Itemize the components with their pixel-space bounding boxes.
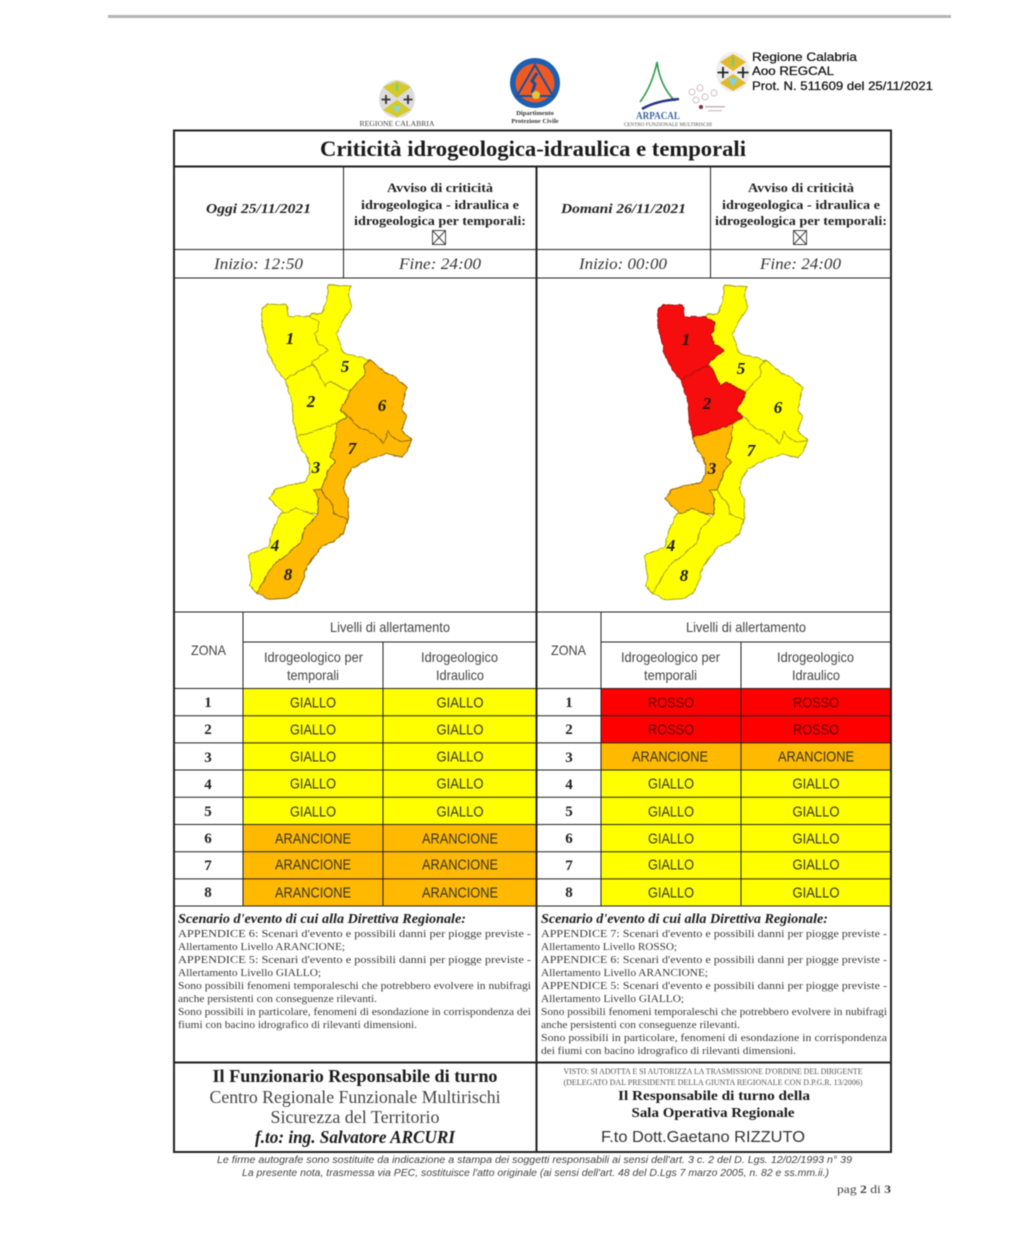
rows tomorrow: GIALLO — [648, 856, 694, 874]
table header today: Idrogeologico — [421, 649, 498, 665]
table: alert levels tomorrow — [551, 619, 891, 906]
table header tomorrow: temporali — [644, 667, 697, 683]
map: Calabria tomorrow: 7 — [747, 441, 757, 460]
stamp text: Prot. N. 511609 del 25/11/2021 — [752, 79, 933, 93]
rows today: GIALLO — [290, 804, 336, 820]
logo row — [360, 58, 725, 128]
rows today: 5 — [204, 804, 212, 820]
logo: Dipartimento Protezione Civile: Dipartimento — [516, 110, 554, 117]
map: Calabria tomorrow: 6 — [774, 398, 783, 417]
signature block left: Sicurezza del Territorio — [270, 1107, 440, 1127]
rows today: GIALLO — [290, 748, 336, 766]
rows tomorrow: GIALLO — [792, 884, 840, 902]
text block: scenario tomorrow — [541, 912, 887, 1057]
rows tomorrow — [565, 694, 854, 902]
map: Calabria today: 5 — [341, 357, 350, 376]
text block: scenario tomorrow: APPENDICE 7: Scenari d'evento e possibili danni per piogge previste - — [541, 928, 887, 940]
logo: molecule mark — [689, 85, 725, 112]
text block: scenario today: Allertamento Livello GIALLO; — [178, 967, 321, 979]
rows tomorrow: ROSSO — [648, 722, 694, 738]
panel: date header tomorrow — [560, 181, 887, 273]
rows today: 2 — [204, 722, 212, 738]
rows tomorrow: 7 — [565, 858, 573, 874]
logo: Dipartimento Protezione Civile: Protezione Civile — [511, 118, 559, 125]
rows tomorrow: 4 — [565, 777, 573, 793]
table header today: Livelli di allertamento — [330, 619, 450, 635]
panel: date header tomorrow: idrogeologica per temporali: — [715, 214, 887, 228]
logo: ARPACAL: ARPACAL — [636, 110, 680, 122]
panel: date header today: Oggi 25/11/2021 — [206, 202, 311, 217]
rows today: ARANCIONE — [275, 830, 351, 848]
rows tomorrow: GIALLO — [792, 804, 840, 820]
rows today: ARANCIONE — [422, 830, 498, 848]
text block: scenario tomorrow: Allertamento Livello GIALLO; — [541, 993, 684, 1005]
logo: ARPACAL: CENTRO FUNZIONALE MULTIRISCHI — [624, 123, 712, 128]
map: Calabria today: 6 — [378, 396, 387, 415]
table header today — [191, 619, 498, 683]
panel: date header today: Fine: 24:00 — [398, 256, 481, 273]
text block: scenario today — [178, 912, 531, 1031]
map: Calabria tomorrow: 5 — [737, 359, 746, 378]
panel: date header today: idrogeologica - idraulica e — [361, 198, 520, 212]
table header tomorrow: Livelli di allertamento — [686, 619, 806, 635]
map: Calabria today: 1 — [286, 329, 294, 348]
logo: Regione Calabria — [360, 80, 435, 128]
panel: date header today: Inizio: 12:50 — [213, 256, 303, 273]
panel: date header tomorrow: Fine: 24:00 — [759, 256, 841, 273]
icon: coat of arms stamp — [716, 52, 750, 92]
text block: scenario today: fiumi con bacino idrografico di rilevanti dimensioni. — [178, 1019, 417, 1031]
rows tomorrow: GIALLO — [648, 884, 694, 902]
rows tomorrow: 2 — [565, 722, 573, 738]
table header tomorrow: Idrogeologico per — [621, 649, 720, 665]
text block: scenario today: Scenario d'evento di cui alla Direttiva Regionale: — [178, 912, 466, 927]
map: Calabria tomorrow: 4 — [666, 536, 675, 555]
rows tomorrow: ARANCIONE — [632, 748, 708, 766]
map: Calabria tomorrow: 8 — [680, 566, 689, 585]
table header tomorrow — [551, 619, 854, 683]
rows today: GIALLO — [436, 748, 484, 766]
text block: scenario today: Allertamento Livello ARANCIONE; — [178, 941, 345, 953]
map: Calabria tomorrow: 2 — [702, 394, 712, 413]
logo: ARPACAL — [624, 62, 712, 128]
signature block left: f.to: ing. Salvatore ARCURI — [255, 1127, 456, 1147]
panel: date header tomorrow: Inizio: 00:00 — [578, 256, 667, 273]
rows today: 4 — [204, 777, 212, 793]
map: Calabria tomorrow: 1 — [682, 330, 690, 349]
rows tomorrow: GIALLO — [792, 856, 840, 874]
map: Calabria today — [248, 285, 412, 599]
signature block left — [210, 1066, 500, 1147]
text block: scenario tomorrow: dei fiumi con bacino idrografico di rilevanti dimensioni. — [541, 1045, 796, 1057]
panel: date header today: idrogeologica per temporali: — [354, 214, 526, 228]
panel: date header tomorrow: idrogeologica - idraulica e — [722, 198, 881, 212]
signature block right: Sala Operativa Regionale — [632, 1106, 794, 1121]
rows tomorrow: ARANCIONE — [778, 748, 854, 766]
rows today — [204, 694, 498, 902]
signature block right: VISTO: SI ADOTTA E SI AUTORIZZA LA TRASMISSIONE D'ORDINE DEL DIRIGENTE — [564, 1067, 863, 1076]
map: Calabria tomorrow — [644, 285, 808, 600]
signature block right: Il Responsabile di turno della — [618, 1089, 810, 1104]
table header today: Idraulico — [436, 667, 484, 683]
rows today: 6 — [204, 831, 212, 847]
rows tomorrow: GIALLO — [792, 776, 840, 792]
text block: scenario today: APPENDICE 6: Scenari d'evento e possibili danni per piogge previste - — [178, 928, 531, 940]
text block: scenario tomorrow: anche persistenti con conseguenze rilevanti. — [541, 1019, 740, 1031]
panel: date header today — [206, 181, 526, 273]
map: Calabria today: 4 — [270, 536, 279, 555]
footnote: Le firme autografe sono sostituite da indicazione a stampa dei soggetti responsabili ai sensi dell'art. 3 c. 2 del D. Lgs. 12/02/1993 n° 39 — [217, 1155, 852, 1166]
rows tomorrow: ROSSO — [793, 722, 839, 738]
text block: scenario tomorrow: Allertamento Livello ROSSO; — [541, 941, 677, 953]
table header tomorrow: Idraulico — [792, 667, 840, 683]
signature block left: Centro Regionale Funzionale Multirischi — [210, 1087, 500, 1107]
rows today: GIALLO — [290, 694, 336, 712]
rows tomorrow: GIALLO — [648, 830, 694, 848]
signature block right: (DELEGATO DAL PRESIDENTE DELLA GIUNTA REGIONALE CON D.P.G.R. 13/2006) — [564, 1078, 863, 1087]
title: Criticità idrogeologica-idraulica e temporali — [320, 136, 746, 161]
footnote: La presente nota, trasmessa via PEC, sostituisce l'atto originale (ai sensi dell'art. 48 del D.Lgs 7 marzo 2005, n. 82 e ss.mm.ii.) — [242, 1168, 829, 1179]
text block: scenario today: anche persistenti con conseguenze rilevanti. — [178, 993, 377, 1005]
rows today: GIALLO — [436, 722, 484, 738]
panel: date header tomorrow: Avviso di criticità — [748, 181, 855, 195]
rows tomorrow: 8 — [565, 885, 573, 901]
text block: scenario tomorrow: Sono possibili in particolare, fenomeni di esondazione in corrispondenza — [541, 1032, 887, 1044]
map: Calabria today: 3 — [311, 458, 321, 477]
rows tomorrow: 5 — [565, 804, 573, 820]
rows today: 7 — [204, 858, 212, 874]
rows tomorrow: GIALLO — [648, 776, 694, 792]
rows tomorrow: ROSSO — [793, 694, 839, 712]
rows today: ARANCIONE — [275, 856, 351, 874]
level cells tomorrow — [601, 688, 891, 906]
panel: date header tomorrow: Domani 26/11/2021 — [560, 202, 686, 217]
rows tomorrow: 3 — [565, 750, 573, 766]
map: Calabria today: 7 — [348, 439, 358, 458]
rows today: GIALLO — [436, 776, 484, 792]
level cells today — [243, 688, 536, 906]
rows tomorrow: GIALLO — [648, 804, 694, 820]
stamp text: Regione Calabria — [752, 50, 857, 64]
rows today: GIALLO — [436, 694, 484, 712]
footnote — [217, 1155, 852, 1179]
protocol stamp — [716, 50, 933, 93]
page number: pag 2 di 3 — [837, 1184, 891, 1196]
rows today: GIALLO — [436, 804, 484, 820]
text block: scenario tomorrow: Allertamento Livello ARANCIONE; — [541, 967, 708, 979]
stamp text: Aoo REGCAL — [752, 64, 834, 78]
signature block right — [564, 1067, 863, 1146]
text block: scenario tomorrow: APPENDICE 5: Scenari d'evento e possibili danni per piogge previste - — [541, 980, 887, 992]
rows today: GIALLO — [290, 722, 336, 738]
rows today: 8 — [204, 885, 212, 901]
table: alert levels today — [191, 619, 536, 906]
signature block right: F.to Dott.Gaetano RIZZUTO — [601, 1129, 805, 1146]
map: Calabria today: 2 — [306, 392, 316, 411]
stamp text — [752, 50, 933, 93]
text block: scenario tomorrow: Sono possibili fenomeni temporaleschi che potrebbero evolvere in nubifragi — [541, 1006, 887, 1018]
table header today: Idrogeologico per — [264, 649, 363, 665]
text block: scenario tomorrow: Scenario d'evento di cui alla Direttiva Regionale: — [541, 912, 828, 927]
text block: scenario tomorrow: APPENDICE 6: Scenari d'evento e possibili danni per piogge previste - — [541, 954, 887, 966]
rows today: GIALLO — [290, 776, 336, 792]
text block: scenario today: Sono possibili in particolare, fenomeni di esondazione in corrispondenza dei — [178, 1006, 531, 1018]
signature block left: Il Funzionario Responsabile di turno — [212, 1066, 498, 1086]
rows today: 1 — [204, 695, 212, 711]
table header tomorrow: Idrogeologico — [777, 649, 854, 665]
table header tomorrow: ZONA — [551, 642, 587, 658]
rows tomorrow: ROSSO — [648, 694, 694, 712]
rows today: ARANCIONE — [275, 884, 351, 902]
text block: scenario today: Sono possibili fenomeni temporaleschi che potrebbero evolvere in nubifragi — [178, 980, 531, 992]
logo: Dipartimento Protezione Civile — [510, 58, 560, 125]
logo: Regione Calabria: REGIONE CALABRIA — [360, 119, 435, 128]
map: Calabria today: 8 — [284, 565, 293, 584]
table header today: ZONA — [191, 642, 227, 658]
table header today: temporali — [287, 667, 339, 683]
text block: scenario today: APPENDICE 5: Scenari d'evento e possibili danni per piogge previste - — [178, 954, 531, 966]
rows today: ARANCIONE — [422, 856, 498, 874]
rows today: ARANCIONE — [422, 884, 498, 902]
rows today: 3 — [204, 750, 212, 766]
rows tomorrow: 1 — [565, 695, 573, 711]
table frame — [174, 130, 891, 1152]
rows tomorrow: 6 — [565, 831, 573, 847]
panel: date header today: Avviso di criticità — [387, 181, 494, 195]
map: Calabria tomorrow: 3 — [707, 459, 717, 478]
rows tomorrow: GIALLO — [792, 830, 840, 848]
